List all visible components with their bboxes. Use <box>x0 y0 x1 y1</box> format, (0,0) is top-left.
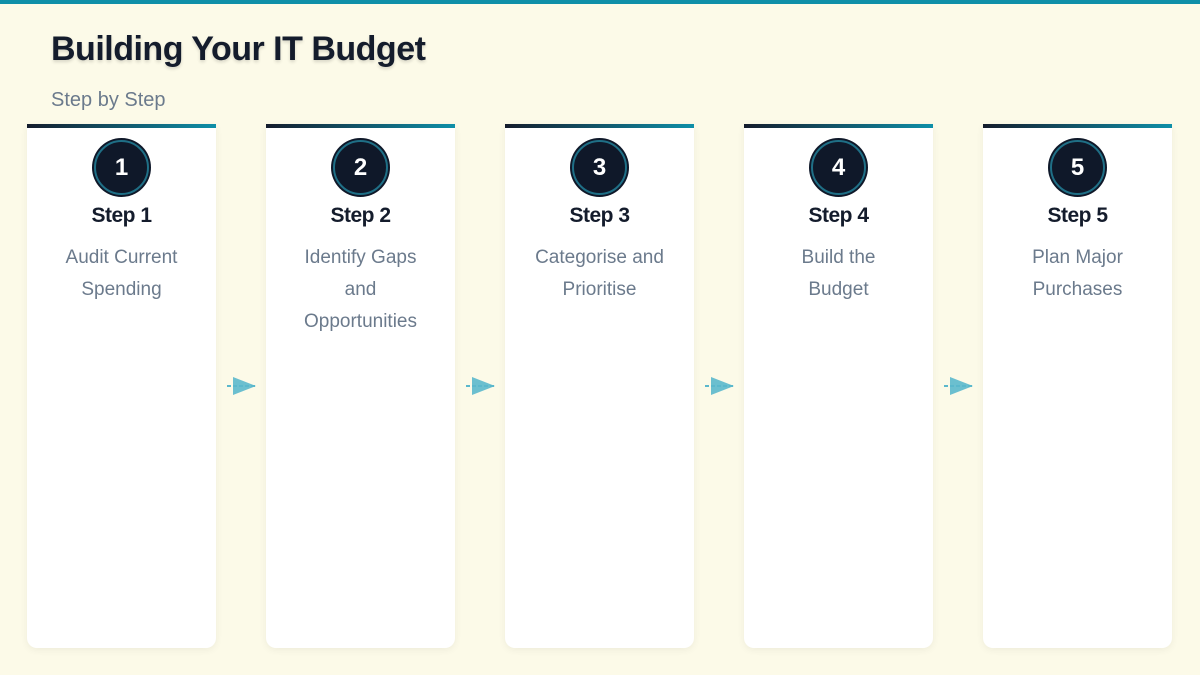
step 1 description <box>66 247 178 300</box>
step 2 description <box>304 247 417 332</box>
step 5 label: Step 5 <box>1047 204 1108 227</box>
step 2 label: Step 2 <box>330 204 391 227</box>
icon: number 5: 5 <box>1071 154 1084 181</box>
step 5 description: Plan Major <box>1032 247 1123 268</box>
icon: number 5 <box>1050 140 1105 195</box>
panel: step 1 <box>27 124 216 648</box>
step 3 description: Categorise and <box>535 247 664 268</box>
icon: number 2: 2 <box>354 154 367 181</box>
step 2 description: and <box>345 279 376 300</box>
panel: step 4 <box>744 124 933 648</box>
subtitle: Step by Step <box>51 89 166 111</box>
panel: step 5 <box>983 124 1172 648</box>
icon: number 1: 1 <box>115 154 128 181</box>
step 3 description <box>535 247 664 300</box>
step 2 description: Identify Gaps <box>305 247 416 268</box>
icon: number 4 <box>811 140 866 195</box>
arrow 3 <box>705 377 734 395</box>
arrow 2 <box>466 377 495 395</box>
step 1 label: Step 1 <box>91 204 152 227</box>
step 4 description: Budget <box>808 279 869 300</box>
step 1 description: Spending <box>81 279 162 300</box>
icon: number 3: 3 <box>593 154 606 181</box>
icon: number 1 <box>94 140 149 195</box>
step 5 description <box>1032 247 1123 300</box>
icon: number 2 <box>333 140 388 195</box>
arrow 1 <box>227 377 256 395</box>
step 5 description: Purchases <box>1033 279 1122 300</box>
step 3 label: Step 3 <box>569 204 630 227</box>
icon: number 4: 4 <box>832 154 845 181</box>
step 4 description <box>802 247 875 300</box>
arrow 4 <box>944 377 973 395</box>
icon: number 3 <box>572 140 627 195</box>
step 1 description: Audit Current <box>66 247 177 268</box>
panel: step 3 <box>505 124 694 648</box>
step 4 description: Build the <box>802 247 875 268</box>
step 4 label: Step 4 <box>808 204 869 227</box>
step 2 description: Opportunities <box>304 311 417 332</box>
step 3 description: Prioritise <box>563 279 636 300</box>
panel: step 2 <box>266 124 455 648</box>
title: Building Your IT Budget <box>51 30 425 68</box>
